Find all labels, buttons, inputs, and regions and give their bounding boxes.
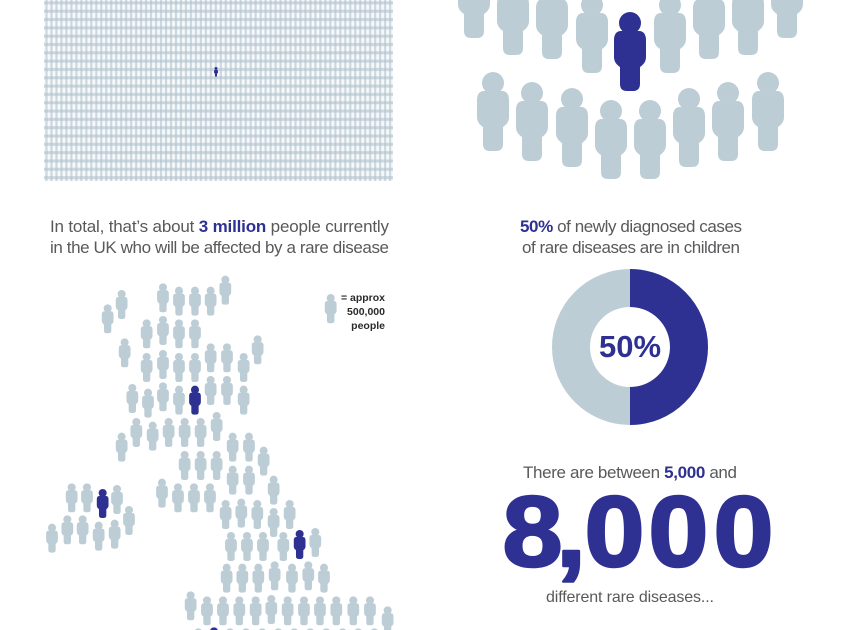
bottom row of figures [477,72,784,179]
text: number of rare diseases [503,463,774,606]
closing line: different rare diseases... [546,589,714,606]
text: 3 million affected: in the UK who will be affected by a rare disease [50,238,389,257]
legend: one figure is approx 500,000 people [325,292,385,332]
legend text: people [351,320,385,332]
big number: 8,000 [503,477,774,588]
top row of figures [458,0,803,73]
intro line: There are between 5,000 and [523,463,737,482]
text: 50 percent in children: 50% of newly diagnosed cases [520,217,742,236]
text: 3 million affected: In total, that’s about 3 million people currently [50,217,389,236]
text: 50 percent in children: of rare diseases are in children [522,238,740,257]
legend text: 500,000 [347,306,385,318]
panel: group of figures with one highlighted [458,0,803,179]
figures: Ireland, England and Wales [46,451,393,630]
map of the UK made of figures [46,276,393,630]
highlighted figure [614,12,646,91]
people grid [44,0,393,181]
donut chart: 50 percent [571,269,708,425]
figures: Scotland and northern England [102,276,270,476]
highlighted person in grid [214,67,218,76]
legend text: = approx [341,292,385,304]
panel: crowd of people [44,0,393,181]
donut label: 50% [599,329,661,364]
legend figure [325,294,337,323]
